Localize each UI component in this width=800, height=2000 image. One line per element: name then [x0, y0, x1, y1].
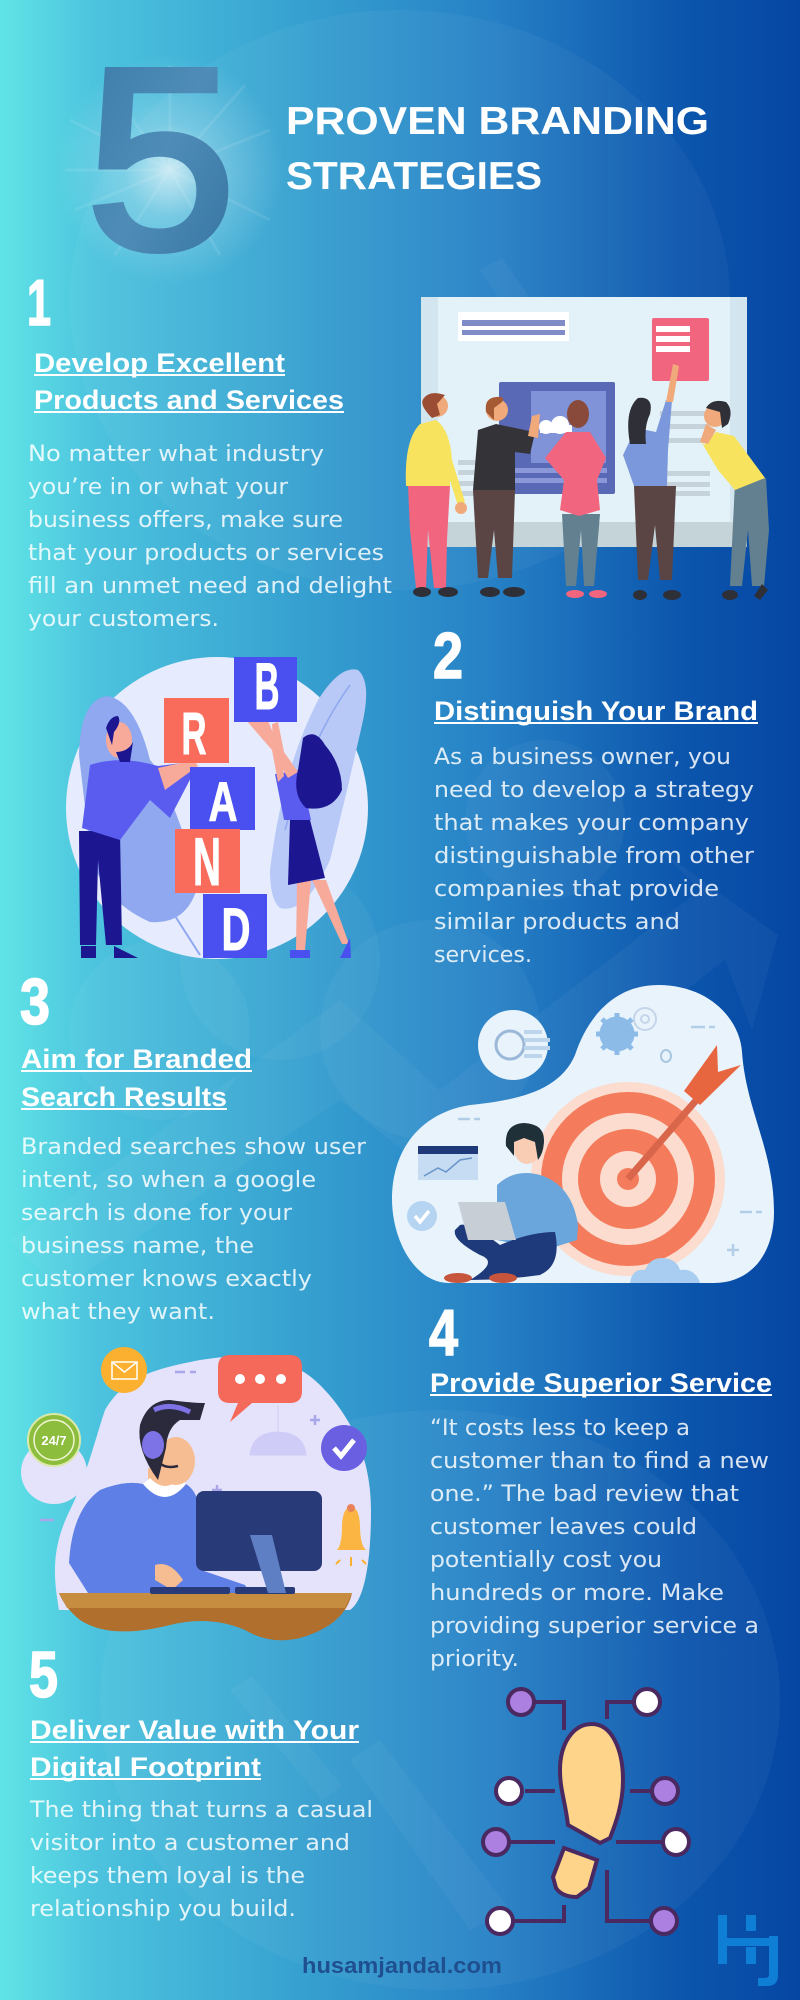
- body 1: fill an unmet need and delight: [28, 574, 392, 599]
- body 4: “It costs less to keep a: [430, 1416, 690, 1441]
- panel: strategy 5 text: [29, 1638, 373, 1922]
- number 2: 2: [433, 619, 463, 692]
- icon: gauge bubble: [478, 1010, 550, 1080]
- person with laptop: [444, 1123, 578, 1283]
- body 5: relationship you build.: [30, 1897, 296, 1922]
- icon: check: [407, 1201, 437, 1231]
- blocks: A: [208, 770, 238, 833]
- desk: [59, 1593, 352, 1640]
- heading 2: Distinguish Your Brand: [434, 696, 758, 726]
- icon: clock 24/7: [28, 1414, 80, 1466]
- panel: strategy 4 text: [429, 1296, 772, 1672]
- body 1: [28, 442, 392, 632]
- body 4: customer leaves could: [430, 1515, 697, 1540]
- blocks: N: [193, 824, 221, 900]
- body 2: services.: [434, 943, 532, 968]
- person with headset: [69, 1400, 250, 1593]
- icon: big numeral 5 with glow: [55, 14, 285, 303]
- body 4: providing superior service a: [430, 1614, 759, 1639]
- person: yellow hoodie: [406, 393, 467, 597]
- illustration: target and person with laptop: [392, 985, 774, 1283]
- icon: big numeral 5 with glow: 5: [86, 14, 236, 303]
- body 2: companies that provide: [434, 877, 719, 902]
- heading 1: [34, 348, 344, 415]
- illustration: team at a board: [406, 297, 769, 600]
- body 2: distinguishable from other: [434, 844, 755, 869]
- body 3: what they want.: [21, 1300, 215, 1325]
- body 3: search is done for your: [21, 1201, 293, 1226]
- body 1: that your products or services: [28, 541, 384, 566]
- heading 4: Provide Superior Service: [430, 1368, 772, 1398]
- body 4: [430, 1416, 769, 1672]
- heading 5: Digital Footprint: [30, 1752, 261, 1782]
- body 1: business offers, make sure: [28, 508, 343, 533]
- icon: digital footprint: [483, 1689, 689, 1934]
- blocks: B: [254, 649, 280, 723]
- person: blue top reaching up: [623, 364, 681, 600]
- panel: strategy 1 text: [27, 266, 392, 632]
- icon: speech bubble: [218, 1355, 302, 1422]
- body 4: priority.: [430, 1647, 519, 1672]
- body 2: As a business owner, you: [434, 745, 731, 770]
- body 2: that makes your company: [434, 811, 749, 836]
- number 1: 1: [27, 266, 51, 339]
- body 5: visitor into a customer and: [30, 1831, 350, 1856]
- body 5: [29, 1798, 373, 1922]
- icon: chart card: [418, 1146, 478, 1180]
- man: [79, 716, 198, 958]
- icon: cloud: [630, 1258, 700, 1283]
- number 4: 4: [429, 1296, 458, 1369]
- icon: bell: [336, 1504, 366, 1566]
- heading 3: [21, 1044, 252, 1112]
- title: PROVEN BRANDING: [286, 100, 709, 143]
- body 1: No matter what industry: [28, 442, 324, 467]
- heading 1: Develop Excellent: [34, 348, 285, 378]
- body 2: need to develop a strategy: [434, 778, 754, 803]
- body 3: customer knows exactly: [21, 1267, 312, 1292]
- heading 3: Search Results: [21, 1082, 227, 1112]
- computer: [150, 1491, 322, 1594]
- body 4: one.” The bad review that: [430, 1482, 739, 1507]
- icon: envelope: [101, 1347, 147, 1393]
- number 5: 5: [29, 1638, 58, 1711]
- heading 1: Products and Services: [34, 385, 344, 415]
- body 5: The thing that turns a casual: [29, 1798, 373, 1823]
- icon: check badge: [321, 1425, 367, 1471]
- panel: strategy 2 text: [433, 619, 758, 968]
- body 3: Branded searches show user: [21, 1135, 367, 1160]
- body 3: [21, 1135, 367, 1325]
- illustration: customer support agent: [21, 1347, 371, 1640]
- body 1: you’re in or what your: [28, 475, 289, 500]
- person: black sweater: [473, 397, 540, 597]
- body 3: intent, so when a google: [21, 1168, 316, 1193]
- body 1: your customers.: [28, 607, 219, 632]
- icon: gears: [596, 1008, 656, 1055]
- heading 3: Aim for Branded: [21, 1044, 252, 1074]
- woman: [241, 706, 351, 958]
- website address: husamjandal.com: [302, 1953, 502, 1978]
- blocks: [164, 649, 297, 963]
- heading 5: [30, 1715, 360, 1782]
- heading 5: Deliver Value with Your: [30, 1715, 360, 1745]
- panel: strategy 3 text: [20, 965, 367, 1325]
- body 4: potentially cost you: [430, 1548, 662, 1573]
- body 2: similar products and: [434, 910, 680, 935]
- person: pink coat: [545, 400, 607, 598]
- title: STRATEGIES: [286, 155, 542, 198]
- icon: lamp: [250, 1405, 306, 1455]
- icon: logo mark: [718, 1915, 778, 1986]
- body 5: keeps them loyal is the: [30, 1864, 305, 1889]
- body 2: [434, 745, 755, 968]
- body 3: business name, the: [21, 1234, 254, 1259]
- number 3: 3: [20, 965, 50, 1038]
- body 4: hundreds or more. Make: [430, 1581, 724, 1606]
- icon: clock 24/7: 24/7: [41, 1433, 67, 1448]
- person: yellow top leaning: [700, 401, 769, 600]
- icon: target: [531, 1045, 741, 1276]
- blocks: R: [182, 701, 206, 767]
- body 4: customer than to find a new: [430, 1449, 769, 1474]
- illustration: BRAND blocks: [66, 649, 368, 963]
- title: [286, 100, 709, 198]
- blocks: D: [222, 896, 250, 963]
